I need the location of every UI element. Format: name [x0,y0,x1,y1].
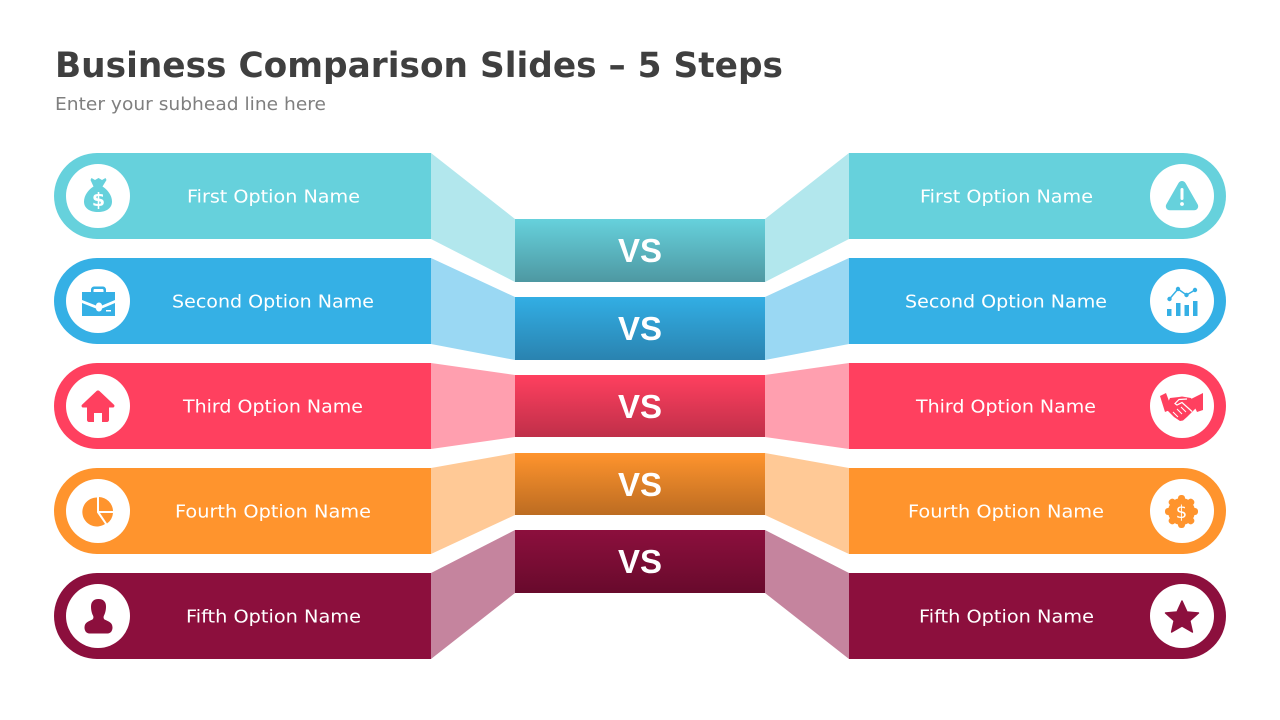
icon: dollar gear: $ [1176,502,1187,523]
right connector 5 [765,530,849,659]
row 2: second option comparison [54,258,1226,360]
left icon badge 2 [66,269,130,333]
left bar 2 [54,258,431,344]
right icon badge 4 [1150,479,1214,543]
right connector 2 [765,258,849,360]
icon: person [84,599,112,634]
right icon badge 5 [1150,584,1214,648]
vs box 4 [515,453,765,515]
icon: handshake [1160,393,1203,421]
right bar 3 [849,363,1226,449]
right icon badge 1 [1150,164,1214,228]
icon: house [82,390,114,422]
left label 4: Fourth Option Name [175,502,371,522]
left connector 2 [431,258,515,360]
left icon badge 5 [66,584,130,648]
left bar 5 [54,573,431,659]
left bar 3 [54,363,431,449]
row 5: fifth option comparison [54,530,1226,659]
right label 2: Second Option Name [905,292,1107,312]
icon: warning triangle [1166,181,1198,210]
row 1: first option comparison [54,153,1226,282]
left connector 1 [431,153,515,282]
left label 3: Third Option Name [182,398,363,418]
vs text 5: VS [618,543,662,580]
row 3: third option comparison [54,363,1226,449]
icon: money bag [84,178,112,212]
right bar 4 [849,468,1226,554]
right label 5: Fifth Option Name [919,608,1094,628]
icon: star [1166,601,1198,632]
right connector 1 [765,153,849,282]
right bar 2 [849,258,1226,344]
vs box 3 [515,375,765,437]
left icon badge 4 [66,479,130,543]
title: Business Comparison Slides – 5 Steps [55,46,783,86]
right connector 3 [765,363,849,449]
left connector 3 [431,363,515,449]
vs text 1: VS [618,232,662,269]
right bar 1 [849,153,1226,239]
icon: money bag: $ [92,189,105,211]
left icon badge 3 [66,374,130,438]
right icon badge 2 [1150,269,1214,333]
right connector 4 [765,453,849,554]
vs text 3: VS [618,388,662,425]
left label 5: Fifth Option Name [186,608,361,628]
icon: pie chart [82,497,113,526]
vs text 4: VS [618,466,662,503]
left label 1: First Option Name [187,188,360,208]
right label 1: First Option Name [920,188,1093,208]
subhead: Enter your subhead line here [55,94,326,115]
icon: briefcase [82,286,115,316]
left connector 4 [431,453,515,554]
left bar 4 [54,468,431,554]
row 4: fourth option comparison [54,453,1226,554]
right icon badge 3 [1150,374,1214,438]
left icon badge 1 [66,164,130,228]
right label 4: Fourth Option Name [908,502,1104,522]
vs box 2 [515,297,765,360]
left connector 5 [431,530,515,659]
vs text 2: VS [618,310,662,347]
left label 2: Second Option Name [172,292,374,312]
right label 3: Third Option Name [915,398,1096,418]
icon: dollar gear [1165,495,1198,528]
vs box 5 [515,530,765,593]
left bar 1 [54,153,431,239]
icon: bar and line chart [1167,287,1198,316]
right bar 5 [849,573,1226,659]
vs box 1 [515,219,765,282]
